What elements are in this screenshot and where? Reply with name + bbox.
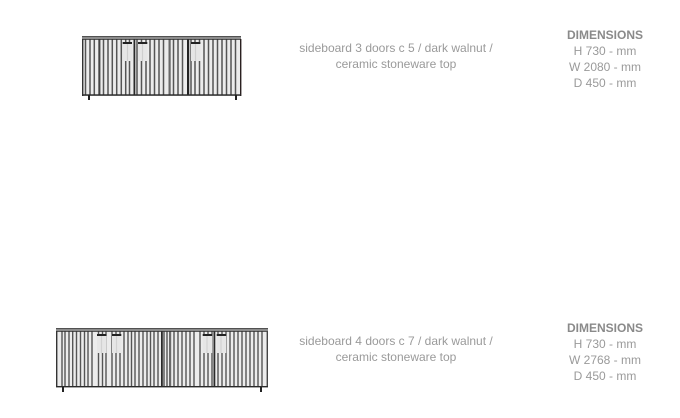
dimensions: sideboard 4 doors: D 450 - mm [574, 368, 636, 382]
dimensions: sideboard 3 doors: D 450 - mm [574, 76, 636, 90]
description: sideboard 4 doors: ceramic stoneware top [336, 350, 456, 364]
dimensions: sideboard 4 doors: DIMENSIONS [567, 320, 643, 334]
dimensions: sideboard 3 doors: DIMENSIONS [567, 28, 643, 42]
dimensions: sideboard 3 doors [567, 28, 643, 90]
description: sideboard 3 doors: sideboard 3 doors c 5 / dark walnut / [299, 41, 493, 55]
description: sideboard 4 doors: sideboard 4 doors c 7 / dark walnut / [299, 334, 493, 348]
description: sideboard 4 doors [299, 334, 493, 364]
dimensions: sideboard 3 doors: W 2080 - mm [569, 60, 641, 74]
product drawing: sideboard 3 doors [82, 36, 242, 100]
dimensions: sideboard 4 doors: H 730 - mm [574, 336, 636, 350]
description: sideboard 3 doors: ceramic stoneware top [336, 57, 456, 71]
dimensions: sideboard 3 doors: H 730 - mm [574, 44, 636, 58]
dimensions: sideboard 4 doors [567, 320, 643, 382]
description: sideboard 3 doors [299, 41, 493, 71]
dimensions: sideboard 4 doors: W 2768 - mm [569, 352, 641, 366]
